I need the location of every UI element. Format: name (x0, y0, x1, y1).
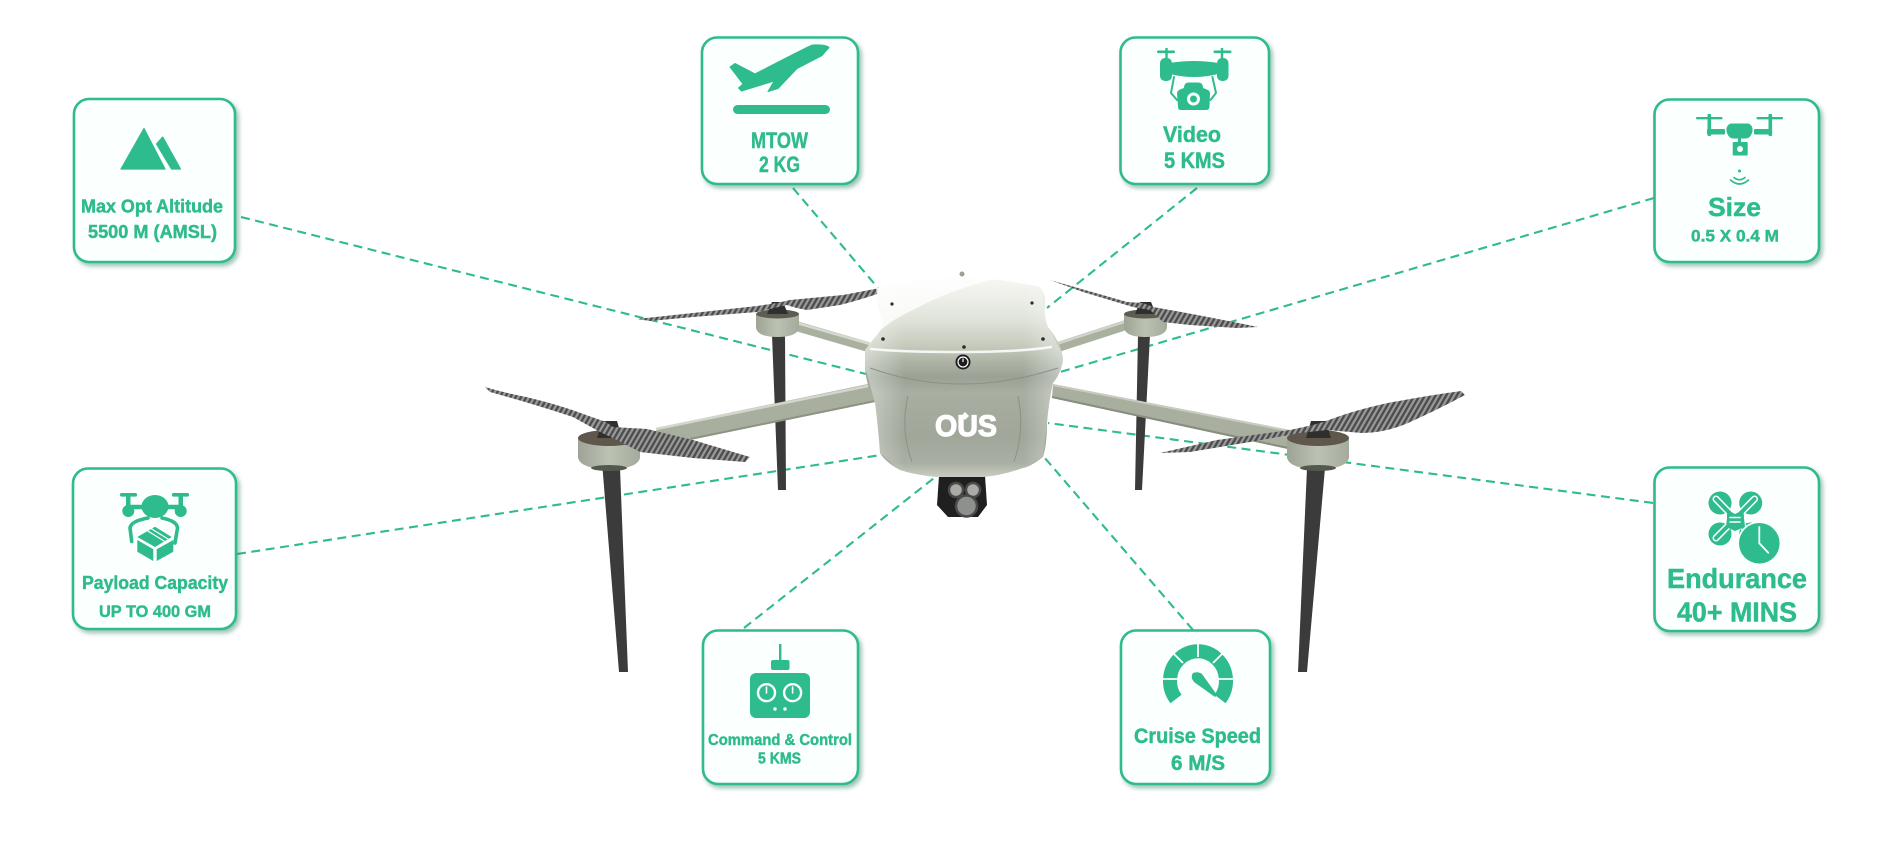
fuselage (865, 272, 1063, 517)
panel: command and control (703, 630, 858, 784)
body shell (865, 277, 1063, 477)
logo: OUS (935, 410, 997, 443)
icon: camera drone (1157, 48, 1232, 110)
icon: drone with camera and signal (1696, 114, 1783, 184)
rear arms (789, 321, 1129, 347)
label: cruise speed: Cruise Speed (1134, 725, 1261, 748)
value: up to 400 gm: UP TO 400 GM (99, 602, 211, 621)
label: endurance: Endurance (1667, 563, 1807, 594)
value: 5500 m: 5500 M (AMSL) (88, 222, 217, 242)
body edge light (865, 287, 1062, 477)
label: max opt altitude: Max Opt Altitude (81, 196, 223, 216)
canopy shading (874, 276, 995, 340)
front propeller right (1160, 391, 1465, 453)
shoulder highlight (871, 347, 1051, 352)
panel: video (1120, 38, 1269, 184)
front propeller left (485, 387, 750, 462)
panel: endurance (1654, 468, 1819, 631)
rear motor right (1124, 302, 1167, 337)
icon: drone carrying parcel (120, 493, 189, 561)
rear propeller right (1050, 280, 1258, 328)
panel: size (1654, 100, 1819, 262)
label: mtow: MTOW (751, 128, 808, 153)
front motor right (1287, 421, 1349, 471)
icon: mountains (121, 128, 180, 169)
panel: max operating altitude (74, 99, 235, 262)
value: 2 kg: 2 KG (759, 152, 800, 177)
power button (956, 354, 970, 370)
icon: airplane taking off (730, 45, 830, 114)
icon: quadcopter with clock (1708, 492, 1781, 565)
screws (881, 272, 1045, 349)
front landing legs (602, 468, 1325, 672)
label: payload capacity: Payload Capacity (82, 572, 229, 593)
panel seam lines (870, 368, 1058, 462)
dashed leader lines (237, 188, 1654, 630)
icon: speedometer (1162, 640, 1234, 699)
icon: remote controller (750, 644, 810, 718)
gimbal camera (937, 476, 987, 517)
label: video: Video (1163, 122, 1221, 147)
label: size: Size (1708, 192, 1761, 222)
rear landing legs (772, 335, 1150, 490)
rear propeller left (637, 288, 880, 321)
value: 40+ mins: 40+ MINS (1677, 596, 1797, 628)
panel: mtow (702, 38, 858, 184)
panel: payload capacity (73, 468, 236, 629)
panel: cruise speed (1121, 630, 1270, 784)
rear motor left (756, 302, 799, 337)
value: 5 kms: 5 KMS (758, 750, 801, 768)
label: command and control: Command & Control (708, 732, 852, 749)
front motor left (578, 421, 640, 471)
drone illustration (485, 272, 1465, 672)
value: 5 kms: 5 KMS (1164, 148, 1225, 173)
value: dimensions: 0.5 X 0.4 M (1691, 226, 1779, 246)
value: 6 m/s: 6 M/S (1171, 752, 1225, 775)
front arms (656, 383, 1290, 450)
